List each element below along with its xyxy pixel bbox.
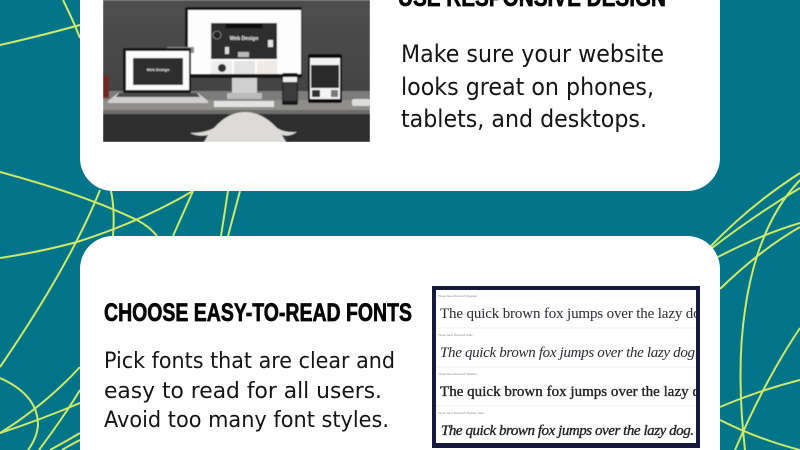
image: font samples: The quick brown fox jumps over the lazy dog [440,384,716,400]
heading: choose easy-to-read fonts: CHOOSE EASY-TO-READ FONTS [104,299,412,327]
image: font samples: The quick brown fox jumps over the lazy dog [440,306,708,322]
text: fonts description: Avoid too many font styles. [104,408,389,433]
image: font samples: Times New Roman® Medium Italic [438,411,485,415]
image: font samples: Times New Roman® Italic [438,333,473,337]
text: responsive description: tablets, and desktops. [401,105,647,133]
panel: use responsive design [80,0,720,191]
text: fonts description: easy to read for all users. [104,379,382,404]
image: responsive devices on desk: Web Design [147,67,170,72]
image: font samples: Times New Roman® Medium [438,372,478,376]
panel: choose easy-to-read fonts [80,236,720,450]
image: font samples: The quick brown fox jumps over the lazy dog. [441,423,694,439]
text: responsive description: looks great on phones, [401,73,654,101]
image: font samples [432,286,716,448]
text: responsive description [401,40,664,133]
text: fonts description [104,349,395,433]
text: responsive description: Make sure your website [401,40,664,68]
image: responsive devices on desk [103,0,370,142]
image: responsive devices on desk: Web Design [230,36,258,42]
image: font samples: The quick brown fox jumps over the lazy dog [440,345,696,361]
text: fonts description: Pick fonts that are clear and [104,349,395,374]
image: font samples: Times New Roman® Regular [438,294,477,298]
